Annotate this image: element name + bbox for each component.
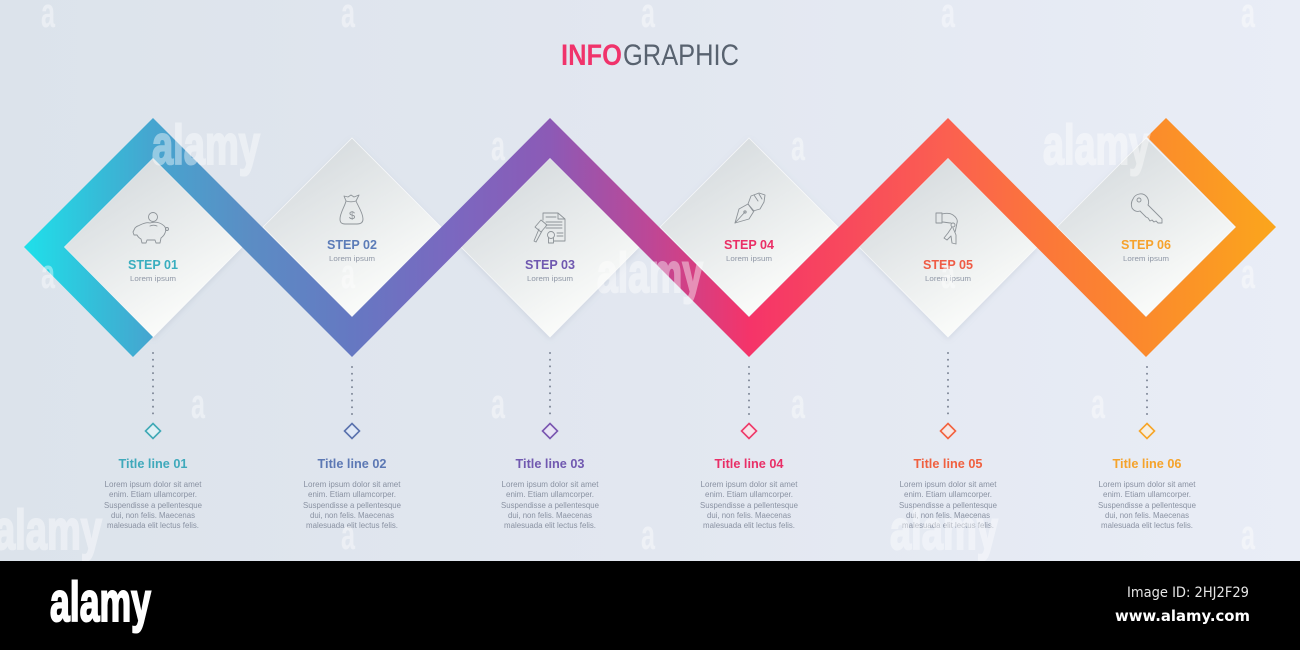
text block: title line 06: Suspendisse a pellentesque <box>1098 501 1197 510</box>
watermarks: a <box>791 122 805 169</box>
panel: step cards <box>64 138 1235 337</box>
text block: title line 04: Lorem ipsum dolor sit amet <box>700 480 798 489</box>
watermarks: a <box>341 250 355 297</box>
watermarks: a <box>1241 250 1255 297</box>
title: GRAPHIC <box>623 39 739 72</box>
footer logo: alamy <box>50 570 151 633</box>
watermarks: a <box>791 380 805 427</box>
text block: title line 03: enim. Etiam ullamcorper. <box>506 490 594 499</box>
label: step 02: STEP 02 <box>327 237 377 252</box>
text block: title line 05: enim. Etiam ullamcorper. <box>904 490 992 499</box>
icon: fountain pen nib <box>735 193 765 223</box>
label: step 05 <box>923 257 973 283</box>
text block: title line 02 <box>303 457 402 530</box>
text block: title line 02: malesuada elit lectus felis. <box>306 521 398 530</box>
text block: title line 05: malesuada elit lectus felis. <box>902 521 994 530</box>
text block: title line 02: Title line 02 <box>318 457 387 471</box>
card: step 05 <box>859 158 1037 337</box>
zigzag gradient ribbon <box>24 118 1276 357</box>
text block: title line 01: Lorem ipsum dolor sit amet <box>104 480 202 489</box>
watermarks: a <box>491 122 505 169</box>
text block: title line 06: malesuada elit lectus felis. <box>1101 521 1193 530</box>
text block: title line 06: Lorem ipsum dolor sit amet <box>1098 480 1196 489</box>
text block: title line 05: dui, non felis. Maecenas <box>906 511 990 520</box>
watermarks: a <box>1091 380 1105 427</box>
label: step 04: STEP 04 <box>724 237 775 252</box>
text block: title line 04: Suspendisse a pellentesque <box>700 501 799 510</box>
icon: piggy bank <box>133 212 168 243</box>
label: step 01: Lorem ipsum <box>130 274 176 283</box>
card: step 01 <box>64 158 242 337</box>
watermarks: a <box>491 380 505 427</box>
icon: key <box>1131 194 1162 223</box>
watermarks: alamy <box>890 498 998 561</box>
label: step 06 <box>1121 237 1171 263</box>
text block: title line 03 <box>501 457 600 530</box>
text block: title line 03: Lorem ipsum dolor sit amet <box>502 480 599 489</box>
label: step 05: STEP 05 <box>923 257 973 272</box>
label: step 06: Lorem ipsum <box>1123 254 1169 263</box>
text block: title line 02: dui, non felis. Maecenas <box>310 511 394 520</box>
text block: title line 01: Title line 01 <box>118 457 188 471</box>
text block: title line 05: Lorem ipsum dolor sit amet <box>900 480 997 489</box>
watermarks: a <box>641 511 655 558</box>
card: step 06 <box>1057 138 1235 316</box>
card: step 03 <box>461 158 639 337</box>
watermarks: a <box>341 511 355 558</box>
text block: title line 01: Suspendisse a pellentesque <box>104 501 203 510</box>
text block: title line 04: dui, non felis. Maecenas <box>707 511 791 520</box>
icon: money bag <box>340 195 363 224</box>
label: step 06: STEP 06 <box>1121 237 1171 252</box>
watermarks: a <box>941 250 955 297</box>
card: step 02 <box>263 138 441 316</box>
label: step 02 <box>327 237 377 263</box>
title: INFO <box>561 39 622 72</box>
label: step 05: Lorem ipsum <box>925 274 971 283</box>
text block: title line 02: enim. Etiam ullamcorper. <box>308 490 396 499</box>
icon: document with gavel <box>534 213 565 243</box>
text block: title line 06: Title line 06 <box>1112 457 1182 471</box>
footer image id: Image ID: 2HJ2F29 <box>1127 585 1249 601</box>
text block: title line 06 <box>1098 457 1197 530</box>
watermarks: alamy <box>597 241 703 304</box>
text block: title line 03: Suspendisse a pellentesque <box>501 501 600 510</box>
step labels <box>128 237 1171 283</box>
text block: title line 01: dui, non felis. Maecenas <box>111 511 195 520</box>
label: step 03: Lorem ipsum <box>527 274 573 283</box>
timeline markers <box>146 424 1154 438</box>
text block: title line 01: malesuada elit lectus felis. <box>107 521 199 530</box>
text block: title line 03: Title line 03 <box>516 457 585 471</box>
label: step 02: Lorem ipsum <box>329 254 375 263</box>
text block: title line 05: Suspendisse a pellentesque <box>899 501 998 510</box>
text block: title line 04 <box>700 457 799 530</box>
text block: title line 03: dui, non felis. Maecenas <box>508 511 592 520</box>
text block: title line 06: enim. Etiam ullamcorper. <box>1103 490 1191 499</box>
watermarks: a <box>41 250 55 297</box>
text block: title line 04: Title line 04 <box>714 457 784 471</box>
text block: title line 01: enim. Etiam ullamcorper. <box>109 490 197 499</box>
title <box>561 39 739 72</box>
label: step 04: Lorem ipsum <box>726 254 772 263</box>
icon: hand with keys <box>936 213 957 244</box>
text block: title line 06: dui, non felis. Maecenas <box>1105 511 1189 520</box>
text block: title line 02: Suspendisse a pellentesque <box>303 501 402 510</box>
watermarks: a <box>1241 511 1255 558</box>
text block: title line 03: malesuada elit lectus felis. <box>504 521 596 530</box>
text block: title line 05 <box>899 457 998 530</box>
text block: title line 05: Title line 05 <box>914 457 983 471</box>
text block: title line 04: malesuada elit lectus felis. <box>703 521 795 530</box>
text block: title line 02: Lorem ipsum dolor sit amet <box>304 480 401 489</box>
icon: money bag: $ <box>349 210 355 222</box>
watermarks: alamy <box>1043 113 1150 176</box>
label: step 01 <box>128 257 178 283</box>
dotted connectors <box>153 353 1147 416</box>
label: step 04 <box>724 237 775 263</box>
text block: title line 04: enim. Etiam ullamcorper. <box>705 490 793 499</box>
card: step 04 <box>660 138 838 316</box>
text block: title line 01 <box>104 457 203 530</box>
footer url: www.alamy.com <box>1115 607 1250 625</box>
watermarks: a <box>191 380 205 427</box>
label: step 01: STEP 01 <box>128 257 178 272</box>
watermarks: alamy <box>152 113 260 176</box>
label: step 03: STEP 03 <box>525 257 575 272</box>
label: step 03 <box>525 257 575 283</box>
footer bar <box>0 561 1300 650</box>
